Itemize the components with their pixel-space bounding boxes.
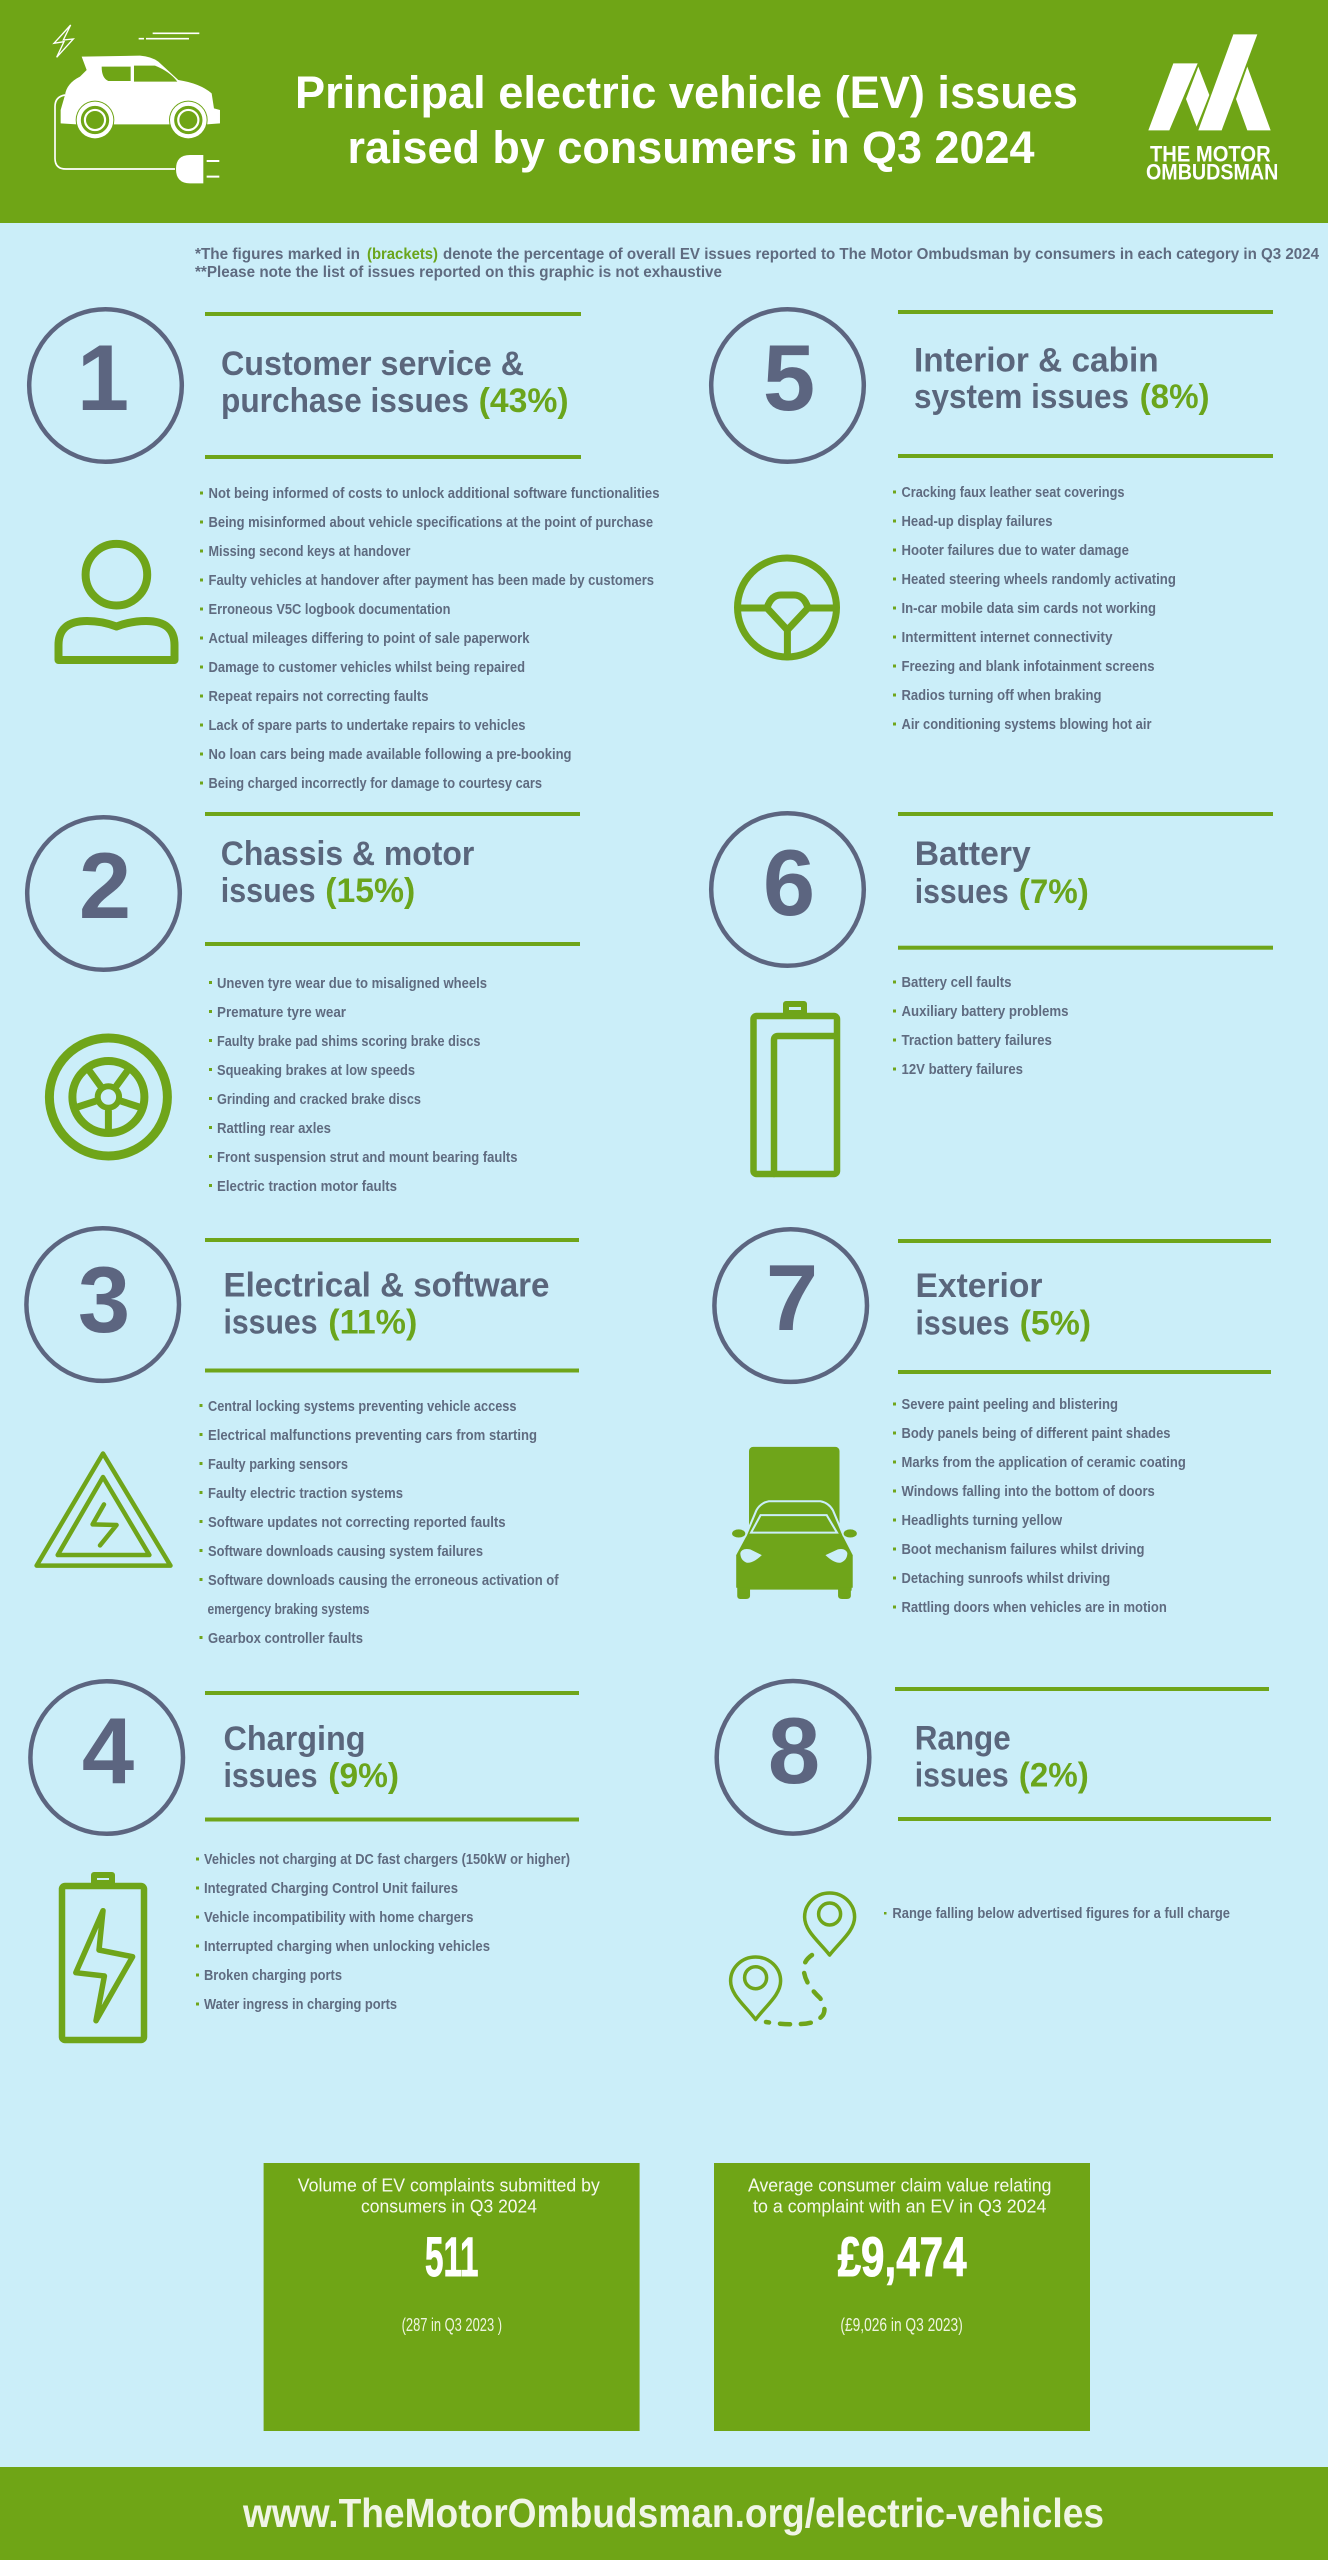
issue list 3: Faulty parking sensors bbox=[208, 1457, 348, 1473]
heading 8 bbox=[895, 1687, 1271, 1821]
issue list 1: Lack of spare parts to undertake repairs to vehicles bbox=[208, 718, 526, 734]
issue list 5: In-car mobile data sim cards not working bbox=[902, 601, 1156, 617]
number badge 2 bbox=[27, 817, 180, 970]
heading 3 bbox=[205, 1238, 579, 1372]
number badge 8 bbox=[717, 1681, 869, 1834]
heading 7: (5%) bbox=[1020, 1305, 1091, 1343]
issue list 5: Radios turning off when braking bbox=[902, 688, 1102, 704]
number badge 7 bbox=[714, 1229, 867, 1382]
heading 4 bbox=[205, 1691, 579, 1822]
issue list 3: Software downloads causing the erroneous activation of bbox=[208, 1573, 559, 1589]
title: raised by consumers in Q3 2024 bbox=[348, 122, 1034, 173]
heading 6: issues bbox=[915, 873, 1009, 911]
issue list 2: Premature tyre wear bbox=[217, 1005, 346, 1021]
header banner bbox=[0, 0, 1328, 223]
stat box: volume of EV complaints bbox=[264, 2163, 640, 2431]
panel 3: electrical and software issues bbox=[26, 1228, 579, 1647]
icon: battery bbox=[754, 1004, 837, 1174]
issue list 5: Cracking faux leather seat coverings bbox=[902, 485, 1124, 501]
number badge 1 bbox=[29, 309, 182, 462]
heading 6: Battery bbox=[915, 835, 1031, 873]
issue list 2: Rattling rear axles bbox=[217, 1121, 331, 1137]
stat box: volume of EV complaints: (287 in Q3 2023 ) bbox=[402, 2315, 502, 2335]
issue list 4: Water ingress in charging ports bbox=[204, 1997, 397, 2013]
big number: £9,474: £9,474 bbox=[838, 2225, 967, 2288]
heading 4: Charging bbox=[224, 1720, 366, 1758]
footer banner with website address: www.TheMotorOmbudsman.org/electric-vehicles bbox=[242, 2490, 1104, 2536]
issue list 7: Headlights turning yellow bbox=[902, 1513, 1063, 1529]
icon: charging battery bbox=[62, 1875, 144, 2040]
heading 5: system issues bbox=[914, 378, 1129, 416]
issue list 5: Intermittent internet connectivity bbox=[902, 630, 1112, 646]
heading 1: purchase issues bbox=[221, 382, 469, 420]
issue list 4 bbox=[196, 1852, 570, 2013]
heading 5: (8%) bbox=[1140, 378, 1210, 416]
stat box: average consumer claim value bbox=[714, 2163, 1090, 2431]
footnotes: *The figures marked in bbox=[195, 246, 360, 263]
heading 2: (15%) bbox=[325, 872, 415, 910]
number badge 7: 7 bbox=[766, 1245, 818, 1350]
heading 8: Range bbox=[915, 1719, 1011, 1757]
issue list 1: Actual mileages differing to point of sale paperwork bbox=[208, 631, 530, 647]
issue list 2: Electric traction motor faults bbox=[217, 1179, 397, 1195]
icon: route with two location pins bbox=[731, 1893, 855, 2024]
stat box: average consumer claim value: Average consumer claim value relating bbox=[748, 2175, 1052, 2196]
panel 4: charging issues bbox=[30, 1681, 579, 2040]
issue list 5: Air conditioning systems blowing hot air bbox=[902, 717, 1152, 733]
heading 1: Customer service & bbox=[221, 345, 524, 383]
issue list 7: Severe paint peeling and blistering bbox=[902, 1397, 1118, 1413]
issue list 6: 12V battery failures bbox=[902, 1062, 1023, 1078]
footnotes: denote the percentage of overall EV issues reported to The Motor Ombudsman by consumers in each category in Q3 2024 bbox=[443, 246, 1319, 263]
title bbox=[295, 67, 1078, 173]
number badge 3 bbox=[26, 1228, 179, 1381]
heading 7: issues bbox=[916, 1305, 1010, 1343]
issue list 6: Auxiliary battery problems bbox=[902, 1004, 1068, 1020]
number badge 1: 1 bbox=[77, 325, 129, 430]
issue list 3: Faulty electric traction systems bbox=[208, 1486, 403, 1502]
issue list 1: Missing second keys at handover bbox=[208, 544, 411, 560]
heading 6 bbox=[898, 812, 1273, 950]
number badge 4: 4 bbox=[82, 1698, 134, 1803]
heading 2: issues bbox=[221, 872, 316, 910]
heading 6: (7%) bbox=[1019, 873, 1089, 911]
heading 1: (43%) bbox=[479, 382, 569, 420]
issue list 2: Faulty brake pad shims scoring brake discs bbox=[217, 1034, 480, 1050]
number badge 6: 6 bbox=[763, 830, 815, 935]
issue list 7: Rattling doors when vehicles are in motion bbox=[902, 1600, 1167, 1616]
issue list 7: Boot mechanism failures whilst driving bbox=[902, 1542, 1144, 1558]
number badge 6 bbox=[711, 813, 864, 966]
issue list 2: Front suspension strut and mount bearing faults bbox=[217, 1150, 518, 1166]
issue list 4: Broken charging ports bbox=[204, 1968, 342, 1984]
issue list 5: Heated steering wheels randomly activating bbox=[902, 572, 1176, 588]
issue list 4: Integrated Charging Control Unit failures bbox=[204, 1881, 458, 1897]
issue list 3: Gearbox controller faults bbox=[208, 1631, 363, 1647]
issue list 6: Traction battery failures bbox=[902, 1033, 1052, 1049]
issue list 1 bbox=[200, 486, 660, 792]
stat box: volume of EV complaints: Volume of EV complaints submitted by bbox=[298, 2175, 601, 2196]
number badge 5 bbox=[711, 309, 864, 462]
issue list 4: Interrupted charging when unlocking vehicles bbox=[204, 1939, 490, 1955]
issue list 5: Hooter failures due to water damage bbox=[902, 543, 1129, 559]
footnotes: **Please note the list of issues reported on this graphic is not exhaustive bbox=[195, 264, 722, 281]
issue list 5: Freezing and blank infotainment screens bbox=[902, 659, 1154, 675]
issue list 5 bbox=[893, 485, 1176, 733]
stat box: average consumer claim value: to a complaint with an EV in Q3 2024 bbox=[753, 2196, 1046, 2217]
heading 8: issues bbox=[915, 1757, 1009, 1795]
panel 1: customer service and purchase issues bbox=[29, 309, 659, 792]
issue list 3 bbox=[200, 1399, 559, 1647]
stat box: volume of EV complaints: consumers in Q3 2024 bbox=[361, 2196, 537, 2217]
issue list 7: Body panels being of different paint shades bbox=[902, 1426, 1170, 1442]
number badge 5: 5 bbox=[763, 325, 815, 430]
issue list 1: No loan cars being made available following a pre-booking bbox=[208, 747, 572, 763]
heading 7: Exterior bbox=[916, 1267, 1042, 1305]
issue list 1: Damage to customer vehicles whilst being repaired bbox=[208, 660, 525, 676]
number badge 4 bbox=[30, 1681, 183, 1834]
icon: electric car with charging plug bbox=[54, 25, 220, 183]
big number: 511: 511 bbox=[425, 2225, 478, 2288]
heading 3: issues bbox=[224, 1304, 318, 1342]
issue list 6 bbox=[893, 975, 1068, 1078]
issue list 3: emergency braking systems bbox=[208, 1602, 370, 1618]
panel 8: range issues bbox=[717, 1681, 1271, 2024]
issue list 3: Central locking systems preventing vehicle access bbox=[208, 1399, 516, 1415]
issue list 5: Head-up display failures bbox=[902, 514, 1052, 530]
issue list 1: Faulty vehicles at handover after payment has been made by customers bbox=[208, 573, 654, 589]
issue list 1: Not being informed of costs to unlock additional software functionalities bbox=[208, 486, 660, 502]
issue list 7: Windows falling into the bottom of doors bbox=[902, 1484, 1155, 1500]
logo: The Motor Ombudsman: THE MOTOR bbox=[1150, 142, 1271, 167]
heading 2: Chassis & motor bbox=[221, 835, 474, 873]
number badge 3: 3 bbox=[78, 1247, 130, 1352]
heading 3: Electrical & software bbox=[224, 1267, 550, 1305]
footnotes: (brackets) bbox=[367, 246, 438, 263]
issue list 7 bbox=[893, 1397, 1186, 1616]
issue list 8: Range falling below advertised figures for a full charge bbox=[892, 1906, 1230, 1922]
issue list 7: Detaching sunroofs whilst driving bbox=[902, 1571, 1110, 1587]
issue list 1: Being misinformed about vehicle specifications at the point of purchase bbox=[208, 515, 653, 531]
heading 7 bbox=[898, 1239, 1271, 1374]
heading 5: Interior & cabin bbox=[914, 342, 1159, 380]
panel 6: battery issues bbox=[711, 812, 1273, 1174]
issue list 7: Marks from the application of ceramic coating bbox=[902, 1455, 1186, 1471]
icon: steering wheel bbox=[738, 558, 836, 657]
issue list 2 bbox=[209, 976, 518, 1195]
icon: car with open bonnet bbox=[732, 1447, 857, 1600]
issue list 1: Being charged incorrectly for damage to courtesy cars bbox=[208, 776, 542, 792]
panel 2: chassis and motor issues bbox=[27, 812, 580, 1195]
heading 2 bbox=[205, 812, 580, 946]
icon: electrical warning triangle bbox=[37, 1454, 170, 1566]
icon: wheel bbox=[49, 1038, 167, 1156]
issue list 6: Battery cell faults bbox=[902, 975, 1012, 991]
issue list 2: Uneven tyre wear due to misaligned wheels bbox=[217, 976, 487, 992]
issue list 3: Software downloads causing system failures bbox=[208, 1544, 483, 1560]
icon: person bbox=[58, 544, 174, 660]
panel 7: exterior issues bbox=[714, 1229, 1271, 1616]
issue list 1: Repeat repairs not correcting faults bbox=[208, 689, 428, 705]
number badge 2: 2 bbox=[79, 833, 131, 938]
heading 3: (11%) bbox=[328, 1304, 417, 1342]
heading 1 bbox=[205, 312, 581, 459]
number badge 8: 8 bbox=[768, 1698, 820, 1803]
issue list 4: Vehicle incompatibility with home chargers bbox=[204, 1910, 473, 1926]
issue list 2: Squeaking brakes at low speeds bbox=[217, 1063, 415, 1079]
heading 5 bbox=[898, 310, 1273, 458]
stat box: average consumer claim value: (£9,026 in Q3 2023) bbox=[840, 2315, 963, 2335]
issue list 2: Grinding and cracked brake discs bbox=[217, 1092, 421, 1108]
issue list 3: Electrical malfunctions preventing cars from starting bbox=[208, 1428, 537, 1444]
footer banner with website address bbox=[0, 2467, 1328, 2560]
heading 4: (9%) bbox=[328, 1757, 399, 1795]
heading 8: (2%) bbox=[1019, 1757, 1089, 1795]
title: Principal electric vehicle (EV) issues bbox=[295, 67, 1078, 118]
issue list 3: Software updates not correcting reported faults bbox=[208, 1515, 506, 1531]
logo: The Motor Ombudsman bbox=[1146, 34, 1278, 184]
heading 4: issues bbox=[224, 1757, 318, 1795]
panel 5: interior and cabin system issues bbox=[711, 309, 1273, 733]
issue list 4: Vehicles not charging at DC fast chargers (150kW or higher) bbox=[204, 1852, 570, 1868]
logo: The Motor Ombudsman: OMBUDSMAN bbox=[1146, 159, 1278, 184]
footnotes bbox=[195, 246, 1319, 281]
issue list 1: Erroneous V5C logbook documentation bbox=[208, 602, 450, 618]
